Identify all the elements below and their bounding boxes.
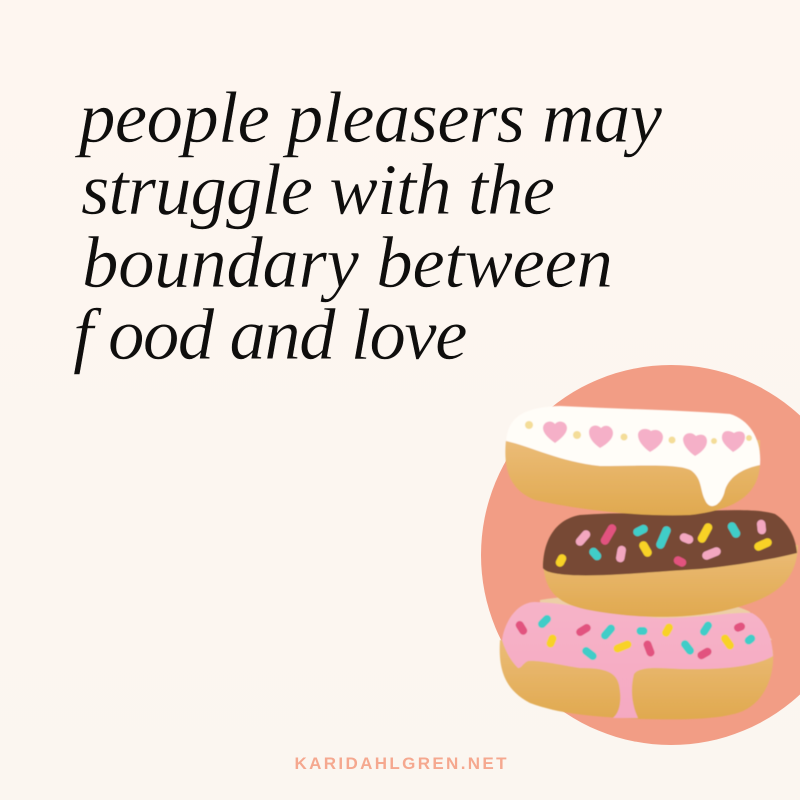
title: boundary between — [82, 222, 613, 303]
yellow dots — [525, 421, 752, 444]
background circle — [481, 365, 800, 745]
pink donut — [500, 595, 773, 719]
white donut — [505, 406, 760, 515]
website footer: KARIDAHLGREN.NET — [294, 754, 507, 773]
heart decorations — [543, 421, 745, 456]
title — [73, 77, 663, 375]
title: people pleasers may — [74, 77, 663, 158]
chocolate donut sprinkles — [560, 524, 768, 562]
illustration: stack of donuts — [500, 406, 798, 719]
pink donut sprinkles — [520, 619, 751, 656]
chocolate donut — [543, 510, 798, 617]
title: food and love — [73, 294, 466, 375]
title: struggle with the — [81, 149, 555, 230]
